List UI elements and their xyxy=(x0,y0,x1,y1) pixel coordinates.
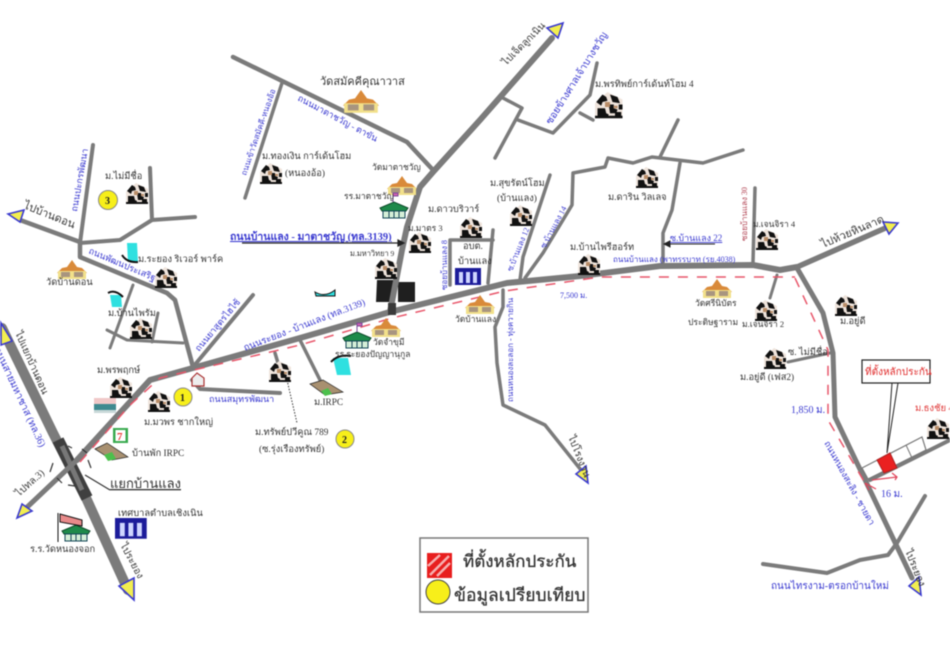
village labels: ม.ทองเงิน การ์เด้นโฮม xyxy=(262,150,351,162)
subject parcel xyxy=(877,453,897,473)
road labels: ถนนหนองละลอก - ทุ่งควายกิน xyxy=(506,297,515,402)
legend swatch: comparable xyxy=(426,580,450,604)
house icons xyxy=(110,92,949,439)
village labels: วัดบ้านแลง xyxy=(455,314,496,324)
legend text: comparable: ข้อมูลเปรียบเทียบ xyxy=(454,585,585,606)
temple icons xyxy=(57,90,732,337)
village labels: วัดบ้านดอน xyxy=(46,277,93,288)
road labels: ถนนพัฒนประเสริฐ xyxy=(87,246,157,284)
marker 1 xyxy=(174,388,192,406)
plot parcels with red subject xyxy=(862,437,926,479)
marker 3 xyxy=(98,190,118,210)
highway 36 xyxy=(2,328,128,590)
village labels: ม.อยู่ดี (เฟส2) xyxy=(740,371,794,383)
SAO compound roads xyxy=(450,230,493,285)
village labels: (หนองอ้อ) xyxy=(285,168,325,179)
interchange tick marks xyxy=(50,446,110,490)
village labels: (บ้านแลง) xyxy=(497,193,537,204)
arrow: to Route 3 xyxy=(17,504,32,518)
roads south of Wat Ban Laeng xyxy=(495,290,585,475)
village labels: (ซ.รุ่งเรืองทรัพย์) xyxy=(259,443,324,455)
village labels: ม.บ้านไพรีฮอร์ท xyxy=(570,241,634,253)
marker 2 xyxy=(336,430,354,448)
north-east soi roads xyxy=(495,63,597,158)
road labels: ถนนไทรงาม-ตรอกบ้านใหม่ xyxy=(771,580,889,592)
arrow: to Chet Luk xyxy=(547,23,563,38)
village labels: ประดิษฐาราม xyxy=(688,317,738,328)
road labels: ไปเจ็ดลูกเนิน xyxy=(498,18,548,69)
village labels: ม.พรพฤกษ์ xyxy=(97,364,140,376)
village labels: อบต. xyxy=(463,242,483,252)
road to Route 3 xyxy=(22,460,77,512)
village labels: วัดศรีนิบัตร xyxy=(695,298,737,308)
arrow line to Ban Laeng - Map Charoen road xyxy=(242,240,404,246)
village labels: ม.ทรัพย์ปวีคูณ 789 xyxy=(255,426,329,438)
village labels: ม.มหาวิทยา 9 xyxy=(350,249,395,258)
parcels xyxy=(862,437,926,479)
dimension arrows xyxy=(865,473,897,490)
village labels: ม.มวพร ชากใหญ่ xyxy=(144,416,213,428)
legend swatch: subject xyxy=(427,553,452,578)
road labels: ถนนบ้านแลง (พาทรรบาท (รย.4038) xyxy=(613,255,736,264)
arrow: north-west highway xyxy=(1,323,12,345)
village labels: ม.ดาริน วิลเลจ xyxy=(608,192,667,203)
road labels: ซ.บ้านแลง 14 xyxy=(539,205,569,250)
village labels: ม.IRPC xyxy=(314,398,343,408)
school flags xyxy=(357,193,398,332)
village labels: ม.ระยอง ริเวอร์ พาร์ค xyxy=(138,253,223,265)
dark warehouse blocks at main junction xyxy=(376,280,415,302)
road labels: ถนนสมุทรพัฒนา xyxy=(209,394,274,405)
village labels: ม.สุขรัตน์โฮม xyxy=(490,177,545,189)
arrow: to Rayong south-west xyxy=(119,578,134,600)
marker 1: 1 xyxy=(180,393,185,404)
upper road: Map Charoen - Tachan xyxy=(233,57,433,170)
village labels: ม.ไม่มีชื่อ xyxy=(105,169,142,182)
marker 2: 2 xyxy=(342,435,347,446)
arrow line for Soi Ban Laeng 22 xyxy=(664,241,715,247)
arrow: to Ban Don xyxy=(8,210,24,222)
office icons xyxy=(115,268,481,539)
village labels: เทศบาลตำบลเชิงเนิน xyxy=(118,508,203,519)
village labels: ร.ร.วัดหนองจอก xyxy=(30,544,95,555)
IRPC village icon xyxy=(310,380,343,396)
legend text: subject: ที่ตั้งหลักประกัน xyxy=(463,549,577,571)
village labels: ซ. ไม่มีชื่อ xyxy=(788,345,828,358)
main road: Rayong - Ban Laeng xyxy=(77,265,797,460)
red dashed distance route xyxy=(80,277,865,483)
small gate building xyxy=(192,373,204,386)
legend box xyxy=(420,538,588,612)
callout: subject location xyxy=(862,360,932,453)
marker 3: 3 xyxy=(105,196,110,207)
road labels: ถนนหนองสะลิง - ชายดา xyxy=(822,439,877,527)
side road west of Wat Samakkhi xyxy=(245,83,282,198)
north-west roads xyxy=(20,220,193,367)
village labels xyxy=(30,75,950,555)
road labels: ซอยบ้านแลง 30 xyxy=(740,187,749,241)
village labels: วัดสมัคคีคุณาวาส xyxy=(320,75,405,88)
arrow: to Rayong south-east xyxy=(909,577,921,595)
road labels: ถนนระยอง - บ้านแลง (ทล.3139) xyxy=(242,297,367,354)
7-Eleven sign: 7 xyxy=(117,431,123,443)
water ponds xyxy=(108,243,351,375)
village labels: ม.บ้านไพรัม xyxy=(108,307,156,319)
road labels: ถนนมาตาชวัญ - ตาขัน xyxy=(296,93,379,144)
callout box xyxy=(862,360,930,383)
callout text: ที่ตั้งหลักประกัน xyxy=(865,364,932,378)
plot access road xyxy=(870,440,950,480)
road labels: ไปบ้านดอน xyxy=(21,198,78,231)
road labels: ไประยอง xyxy=(117,540,146,581)
village labels: วัดมาตาชวัญ xyxy=(372,162,421,172)
village labels: รร.มาตาชวัญ xyxy=(344,191,394,201)
road labels: ถนนยาสูตรไฮไซ้ xyxy=(193,297,243,354)
road labels: ถนนบ้านแลง - มาตาชวัญ (ทล.3139) xyxy=(230,230,392,243)
Tesco sign xyxy=(94,398,116,413)
road labels: ซ.บ้านแลง 22 xyxy=(670,233,722,243)
road labels: ไปทล.3) xyxy=(12,467,47,500)
road labels: ไปแยกบ้านดอน xyxy=(12,328,51,396)
legend xyxy=(420,538,588,612)
road labels: ซอยบ้านแลง 8 xyxy=(440,240,449,290)
village labels: บ้านพัก IRPC xyxy=(132,448,184,459)
village labels: ม.เจนจิรา 4 xyxy=(753,219,796,229)
gate on main road xyxy=(388,303,396,315)
village labels: บ้านแลง xyxy=(458,256,492,267)
road labels: ซ.บ้านแลง 12 xyxy=(506,226,531,273)
village labels: รร.ระยองปัญญานุกูล xyxy=(335,349,410,360)
road labels: 7,500 ม. xyxy=(560,291,587,300)
Flag xyxy=(58,513,82,542)
road north to Map Ta Phut direction xyxy=(390,38,552,312)
IRPC housing icon xyxy=(95,443,128,461)
road east to Huai Hin Dat xyxy=(797,226,890,267)
village labels: ม.อยู่ดี xyxy=(840,315,866,327)
village labels: ม.เจนจิรา 2 xyxy=(742,319,784,329)
dashed pointer to Sap Pawikhun village xyxy=(287,380,297,423)
village labels: ม.มาตร 3 xyxy=(408,223,443,233)
village labels: ม.พรทิพย์การ์เด้นท์โฮม 4 xyxy=(595,78,694,90)
village labels: ม.ดาวบริวาร์ xyxy=(428,203,479,215)
road labels: ไประยอง xyxy=(902,547,928,588)
road labels: ไปห้วยหินลาด xyxy=(818,213,886,251)
road labels: ซอยข้างศาลเจ้าบางชวัญ xyxy=(543,30,610,127)
arrow: to Huai Hin Dat xyxy=(883,222,898,234)
7-Eleven sign xyxy=(113,428,128,443)
village labels: แยกบ้านแลง xyxy=(110,476,181,491)
road labels: ถนนปะกรพัฒนา xyxy=(69,148,90,212)
highway interchange dark section xyxy=(58,440,87,498)
callout pointer xyxy=(887,383,898,453)
arrow: south road xyxy=(576,466,588,483)
road south along subject site xyxy=(797,268,912,578)
road labels: ไปโรงงาน xyxy=(565,432,594,479)
road labels: 16 ม. xyxy=(881,489,903,500)
school icons xyxy=(62,202,408,541)
village labels: วัดจำขุมี xyxy=(373,337,404,348)
bottom road xyxy=(763,496,925,573)
comparable markers xyxy=(98,190,354,448)
road labels: ถนนเข้าวัดสมัคคี-หนองอ้อ xyxy=(239,88,277,177)
road labels: 1,850 ม. xyxy=(791,405,825,416)
